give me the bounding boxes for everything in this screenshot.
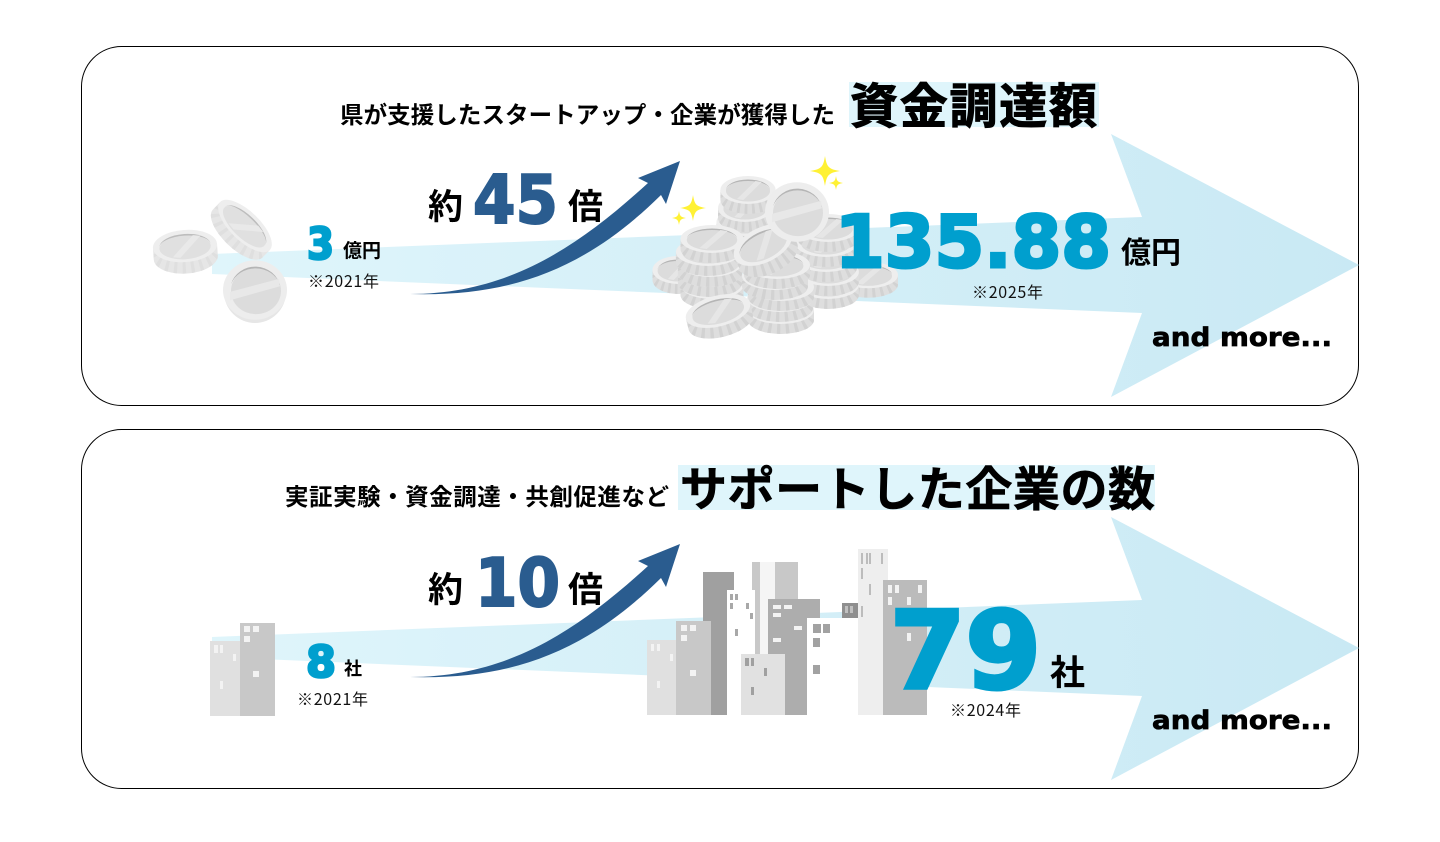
- stat: 3 oku yen in 2021: ※2021年: [308, 268, 379, 292]
- stat: 135.88 oku yen in 2025: [835, 200, 1181, 303]
- stat: 3 oku yen in 2021: [307, 219, 381, 292]
- arrow: background growth arrow: [212, 517, 1359, 780]
- heading: funding amount: 資金調達額: [850, 81, 1097, 134]
- heading: funding amount: 県が支援したスタートアップ・企業が獲得した: [340, 101, 835, 128]
- icon: city buildings: [647, 549, 927, 715]
- multiplier: about 45 times: [428, 161, 603, 239]
- multiplier: about 45 times: 45: [473, 161, 558, 239]
- stat: 79 companies in 2024: ※2024年: [950, 697, 1021, 721]
- multiplier: about 45 times: 倍: [568, 188, 603, 227]
- stat: 8 companies in 2021: ※2021年: [297, 686, 368, 710]
- icon: pile of coins: [652, 176, 898, 345]
- heading: number of supported companies: 実証実験・資金調達・共創促進など: [285, 484, 670, 510]
- multiplier: about 10 times: 約: [428, 571, 463, 610]
- stat: 3 oku yen in 2021: 億円: [343, 240, 381, 262]
- stat: 135.88 oku yen in 2025: 135.88: [835, 200, 1111, 284]
- panel: funding amount: [82, 46, 1359, 406]
- label: and more: and more...: [1152, 706, 1332, 736]
- arrow: growth curve: [410, 161, 680, 294]
- icon: small buildings: [210, 623, 275, 716]
- heading: number of supported companies: [285, 463, 1155, 516]
- stat: 8 companies in 2021: 8: [306, 637, 336, 688]
- stat: 135.88 oku yen in 2025: 億円: [1121, 237, 1181, 270]
- stat: 79 companies in 2024: 79: [890, 590, 1041, 714]
- stat: 135.88 oku yen in 2025: ※2025年: [972, 279, 1043, 303]
- panel outline: [82, 46, 1358, 406]
- multiplier: about 45 times: 約: [428, 188, 463, 227]
- multiplier: about 10 times: 10: [475, 544, 560, 622]
- panel outline: [82, 430, 1358, 788]
- multiplier: about 10 times: 倍: [568, 571, 603, 610]
- multiplier: about 10 times: [428, 544, 603, 622]
- stat: 8 companies in 2021: [297, 637, 368, 710]
- stat: 8 companies in 2021: 社: [344, 659, 362, 679]
- stat: 3 oku yen in 2021: 3: [307, 219, 334, 270]
- heading: number of supported companies: サポートした企業の数: [680, 463, 1155, 516]
- label: and more: and more...: [1152, 323, 1332, 353]
- arrow: background growth arrow: [212, 134, 1359, 397]
- arrow: growth curve: [410, 544, 680, 677]
- heading: funding amount: [340, 81, 1099, 134]
- icon: three coins: [152, 191, 287, 323]
- icon: sparkles: [672, 156, 843, 225]
- panel: supported companies: [82, 430, 1359, 788]
- stat: 79 companies in 2024: 社: [1050, 654, 1085, 693]
